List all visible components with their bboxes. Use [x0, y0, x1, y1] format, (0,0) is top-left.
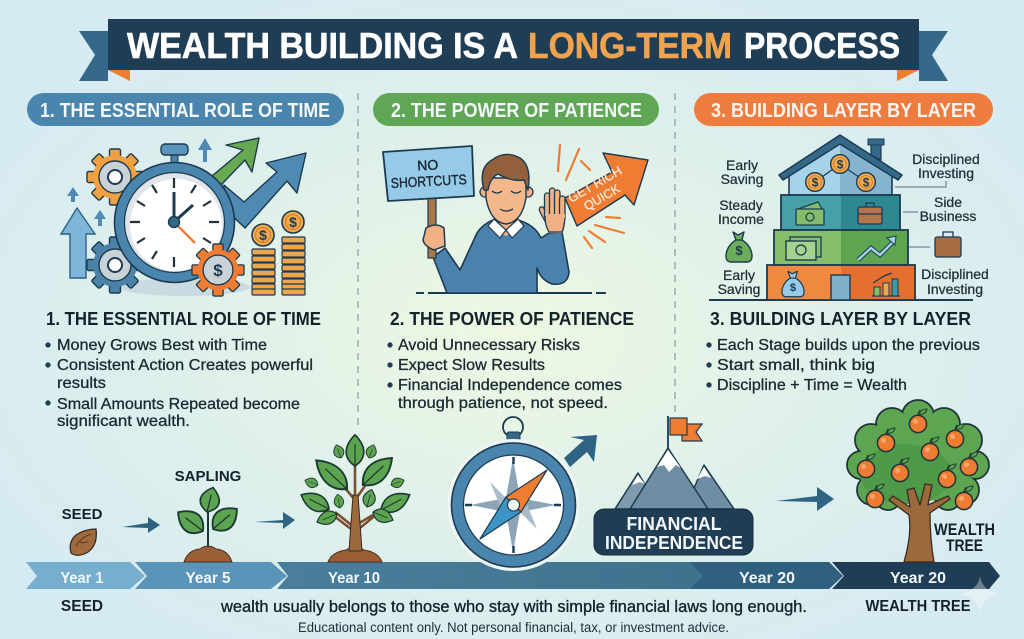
- orange layer: [767, 265, 915, 300]
- column 2 bullets: [388, 337, 622, 412]
- gear orange: [87, 149, 143, 205]
- label early saving bottom: Saving: [718, 281, 760, 297]
- timeline chevrons: [26, 562, 1000, 589]
- mountain main: [630, 448, 708, 509]
- compass needle blue: [480, 497, 521, 539]
- money bag green: [726, 232, 752, 262]
- stopwatch crown: [161, 144, 188, 164]
- seed illustration: [62, 506, 103, 555]
- banner fold right: [897, 70, 919, 81]
- wealth tree: [847, 400, 995, 562]
- wealth tree label: TREE: [946, 537, 983, 555]
- wealth tree label: [934, 521, 995, 555]
- small up arrow middle: [94, 210, 106, 226]
- trunk: [349, 495, 362, 551]
- orange motion lines: [558, 145, 624, 248]
- flag: [670, 418, 687, 435]
- tree crown shade: [860, 444, 952, 504]
- coin stack short: [252, 224, 275, 295]
- big up arrow: [61, 208, 95, 278]
- illustration: person rejecting get rich quick: [383, 145, 648, 293]
- mountain left: [615, 473, 660, 509]
- neck: [490, 216, 522, 236]
- small up arrow top: [198, 138, 212, 162]
- column 2 bullets: Expect Slow Results: [398, 357, 545, 374]
- column 3 bullets: Each Stage builds upon the previous: [717, 337, 980, 354]
- ground shadow: [120, 278, 250, 296]
- chevron final year 20: Year 20: [890, 570, 946, 587]
- column 3 heading: 3. BUILDING LAYER BY LAYER: [710, 309, 971, 329]
- label disciplined investing top: Investing: [918, 165, 974, 181]
- branches: [326, 460, 382, 532]
- seed crease: [76, 534, 91, 546]
- chevron year 5: Year 5: [186, 570, 231, 587]
- title text orange: LONG-TERM: [528, 25, 732, 66]
- sweater: [433, 220, 569, 293]
- illustration: wealth house layers: [709, 135, 989, 300]
- blue zigzag arrow: [224, 153, 306, 228]
- get rich quick arrow: GET RICH: [566, 164, 624, 205]
- get rich quick arrow: QUICK: [581, 181, 623, 213]
- chevron final year 20: [832, 562, 1000, 589]
- title text white end: PROCESS: [744, 25, 900, 66]
- mountain right: [685, 465, 734, 509]
- snow caps: [632, 450, 711, 485]
- flag tail: [682, 424, 702, 441]
- arrow to wealth tree: [776, 487, 834, 511]
- banner ribbon right: [919, 31, 948, 81]
- label early saving top: Early: [726, 157, 758, 173]
- financial independence plaque: INDEPENDENCE: [605, 533, 743, 553]
- sign no shortcuts: SHORTCUTS: [390, 171, 467, 191]
- leaves: [298, 435, 413, 528]
- compass case: [452, 443, 576, 567]
- arrow sapling to tree: [254, 512, 295, 529]
- column 2 heading: 2. THE POWER OF PATIENCE: [390, 309, 634, 329]
- apples: [857, 409, 978, 510]
- banner ribbon left: [79, 31, 108, 81]
- tree crown fill: [848, 401, 988, 509]
- teal layer: [781, 195, 900, 230]
- compass needle orange: [506, 470, 547, 512]
- column 1 text: [46, 309, 321, 430]
- column 2 text: [388, 309, 634, 412]
- tree crown outline: [847, 400, 989, 510]
- chevron year 10 to 20: [277, 562, 843, 589]
- sign no shortcuts: [383, 146, 474, 201]
- column 2 bullets: Financial Independence comes: [398, 377, 622, 394]
- sparkle mark: [961, 576, 998, 613]
- compass hub: [508, 499, 520, 511]
- arrow seed to sapling: [122, 517, 160, 533]
- column 3 bullets: Discipline + Time = Wealth: [717, 377, 907, 394]
- label side business: Business: [920, 208, 976, 224]
- green arrow: [212, 138, 259, 185]
- pill heading 3: [694, 93, 993, 126]
- title text white: WEALTH BUILDING IS A: [127, 25, 518, 66]
- ground line: [416, 292, 606, 294]
- caption wealth tree: WEALTH TREE: [866, 598, 970, 615]
- briefcase: [935, 232, 961, 257]
- gear blue: [87, 237, 143, 293]
- column 3 text: [706, 309, 980, 394]
- pill heading 3: 3. BUILDING LAYER BY LAYER: [711, 99, 976, 122]
- column 1 bullets: significant wealth.: [57, 413, 190, 430]
- small up arrow left: [67, 187, 79, 202]
- young tree illustration: [298, 435, 413, 562]
- compass: [448, 417, 580, 571]
- seed icon: [70, 529, 96, 555]
- label disciplined investing top: Disciplined: [912, 151, 980, 167]
- column 3 bullets: [706, 337, 980, 394]
- sapling illustration: [172, 468, 243, 562]
- label early saving top: Saving: [721, 171, 763, 187]
- disclaimer: Educational content only. Not personal financial, tax, or investment advice.: [298, 620, 729, 635]
- pill heading 2: 2. THE POWER OF PATIENCE: [391, 99, 642, 122]
- attic: [789, 140, 892, 195]
- column 1 heading: 1. THE ESSENTIAL ROLE OF TIME: [46, 309, 321, 329]
- stem: [207, 506, 209, 547]
- section divider right: [674, 93, 676, 425]
- coin stack tall: [282, 211, 305, 295]
- banner body: [108, 19, 919, 70]
- gear orange with dollar: [192, 244, 244, 296]
- compass diagonal points: [490, 482, 537, 529]
- pill heading 2: [373, 93, 659, 126]
- compass rose: [470, 458, 556, 552]
- label disciplined investing bottom: Investing: [927, 281, 983, 297]
- column 2 bullets: through patience, not speed.: [398, 395, 608, 412]
- label disciplined investing bottom: Disciplined: [921, 266, 989, 282]
- arrow compass to mountain: [564, 435, 597, 467]
- ground line: [709, 299, 973, 301]
- chevron year 1: Year 1: [60, 570, 104, 587]
- attic coins: [806, 155, 875, 191]
- label side business: Side: [934, 194, 962, 210]
- compass ticks: [465, 457, 561, 553]
- sign pole: [428, 198, 436, 258]
- financial independence summit: [594, 416, 753, 555]
- chimney cap: [868, 139, 884, 145]
- chevron year 10 to 20: Year 20: [739, 570, 795, 587]
- column 1 bullets: results: [57, 375, 106, 392]
- caption sentence: wealth usually belongs to those who stay with simple financial laws long enough.: [220, 598, 807, 616]
- caption seed: SEED: [61, 598, 103, 615]
- label early saving bottom: Early: [723, 267, 755, 283]
- compass halo: [448, 439, 580, 571]
- label steady income: Steady: [719, 197, 763, 213]
- chevron year 10 to 20: Year 10: [328, 570, 380, 587]
- raised hand: [539, 188, 565, 233]
- gear orange with dollar: $: [213, 261, 223, 280]
- compass crown: [507, 432, 520, 441]
- trunk: [889, 484, 950, 562]
- icon: stopwatch with gears, arrows and coins: [61, 138, 306, 296]
- column 1 bullets: Money Grows Best with Time: [57, 337, 267, 354]
- financial independence plaque: [594, 509, 753, 555]
- title banner: [79, 19, 948, 81]
- sign no shortcuts: NO: [417, 156, 439, 174]
- compass face: [464, 455, 564, 555]
- flag pole: [667, 416, 669, 449]
- sapling label: SAPLING: [175, 468, 241, 485]
- head: [480, 154, 533, 224]
- column 1 bullets: Small Amounts Repeated become: [57, 396, 300, 413]
- compass loop: [503, 417, 523, 437]
- connector lines: [895, 181, 946, 247]
- leaves: [172, 485, 243, 539]
- chimney: [871, 142, 881, 160]
- wealth tree label: WEALTH: [934, 521, 995, 539]
- financial independence plaque: FINANCIAL: [626, 514, 722, 534]
- section divider left: [357, 93, 359, 425]
- soil: [184, 546, 232, 562]
- stopwatch face: [114, 162, 234, 282]
- chevron year 5: [135, 562, 287, 589]
- soil: [328, 547, 382, 562]
- pill heading 1: [27, 93, 344, 126]
- pill heading 1: 1. THE ESSENTIAL ROLE OF TIME: [40, 99, 330, 122]
- get rich quick arrow: [565, 153, 648, 226]
- roof: [779, 135, 902, 180]
- column 3 bullets: Start small, think big: [717, 357, 875, 374]
- chevron year 1: [26, 562, 145, 589]
- column 1 bullets: Consistent Action Creates powerful: [57, 357, 313, 374]
- banner fold left: [108, 70, 130, 81]
- collar: [488, 219, 524, 238]
- green layer: [774, 230, 908, 265]
- column 1 bullets: [46, 337, 313, 430]
- seed label: SEED: [62, 506, 103, 523]
- label steady income: Income: [718, 211, 764, 227]
- left hand: [423, 225, 445, 250]
- column 2 bullets: Avoid Unnecessary Risks: [398, 337, 580, 354]
